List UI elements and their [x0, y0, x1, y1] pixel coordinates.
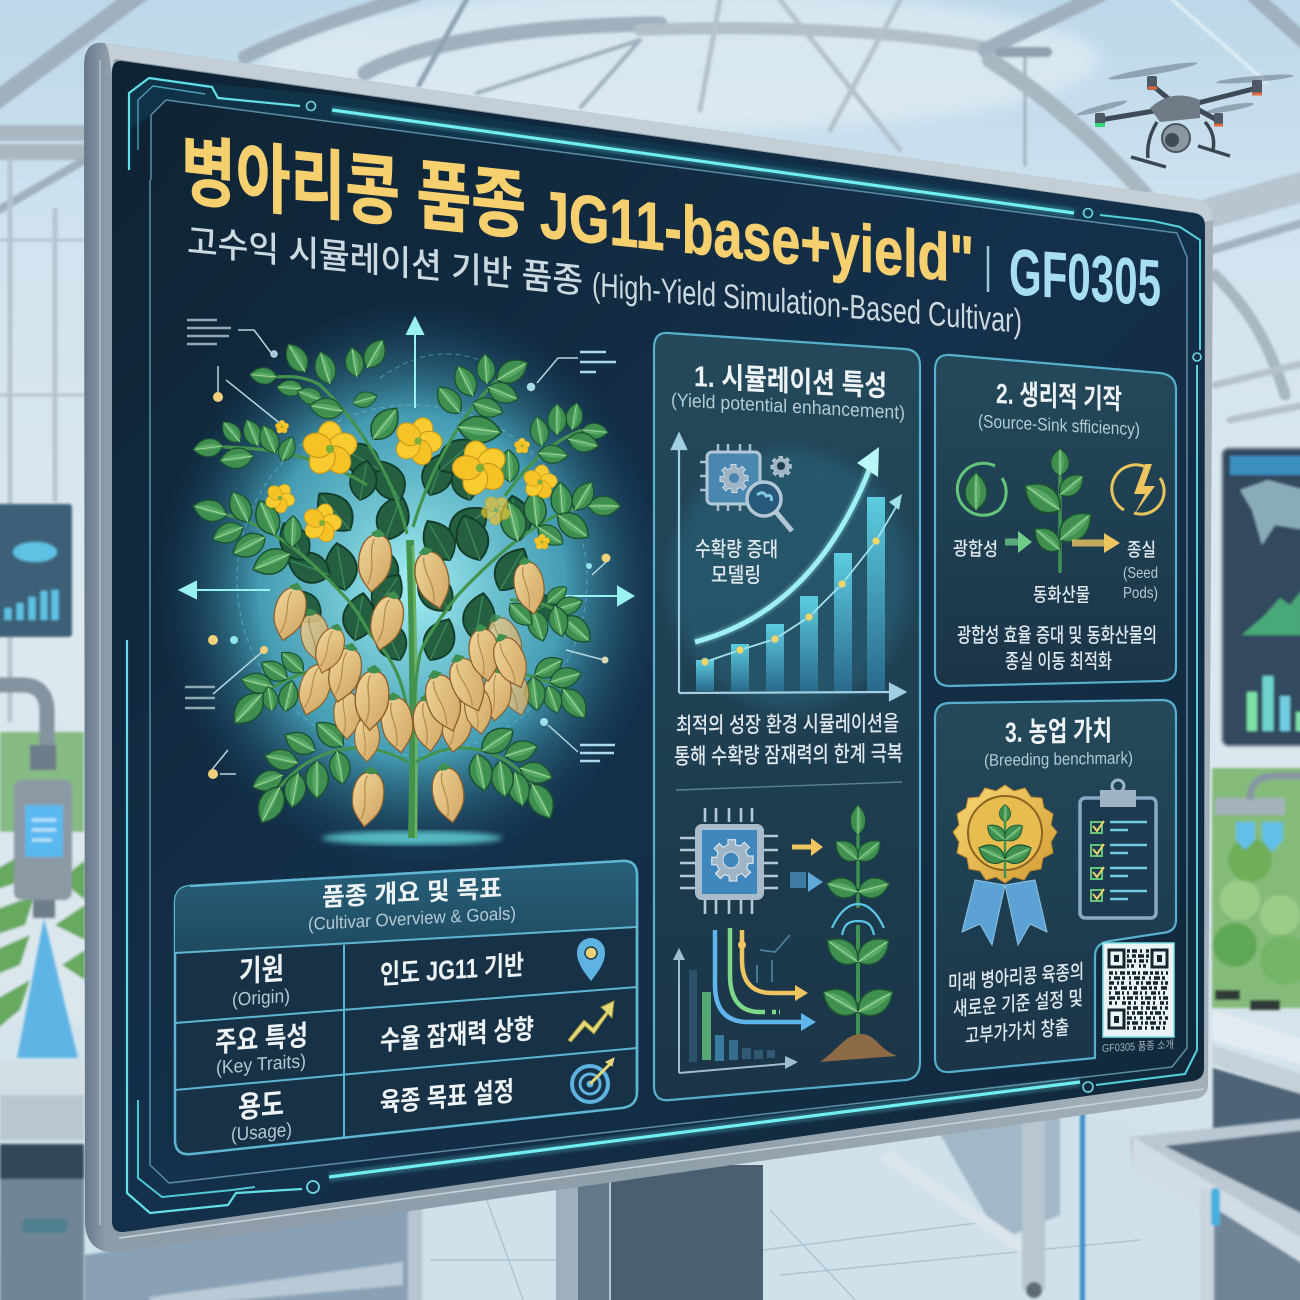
QR code: [1103, 943, 1174, 1037]
row: origin: 인도 JG11 기반: [380, 950, 524, 990]
panel 1 description: 통해 수확량 잠재력의 한계 극복: [674, 741, 903, 769]
panel 1 description: 최적의 성장 환경 시뮬레이션을: [676, 711, 899, 738]
panel 2 description: [957, 624, 1157, 673]
panel 3 description: 고부가가치 창출: [965, 1016, 1069, 1048]
row: key traits: (Key Traits): [216, 1051, 306, 1079]
roof beams: [0, 0, 1300, 720]
panel 1 heading: (Yield potential enhancement): [671, 390, 905, 424]
left plants: [0, 732, 85, 1030]
overview header band: [175, 861, 637, 953]
panel 1 heading: 1. 시뮬레이션 특성: [694, 360, 887, 403]
icon: processor: [680, 808, 778, 914]
panel: 1 simulation traits: [654, 333, 920, 1100]
left sensor device: [0, 685, 78, 1058]
icon: location pin: [577, 938, 605, 981]
icon: energy cycle: [1112, 464, 1164, 515]
modelling label: 수확량 증대: [695, 538, 778, 562]
panel: 3 agricultural value: [935, 700, 1176, 1072]
overview heading: [308, 875, 516, 934]
growth arrows: [180, 318, 633, 605]
title: [181, 129, 1161, 321]
right bench: [1130, 1118, 1300, 1300]
icon: target: [572, 1058, 614, 1102]
dark foliage: [272, 430, 564, 666]
stems and branches: [223, 377, 588, 838]
background tables: [84, 1105, 1085, 1300]
monitor stand: [556, 1165, 763, 1300]
subtitle: (High-Yield Simulation-Based Cultivar): [592, 266, 1022, 341]
label: seed pods: [1123, 539, 1158, 602]
neon border: [127, 78, 1201, 1213]
row: key traits: 수율 잠재력 상향: [380, 1014, 534, 1056]
icon: leaf cycle: [957, 463, 1006, 515]
screen surface: [112, 61, 1205, 1232]
panel 2 description: 종실 이동 최적화: [1005, 650, 1112, 673]
subtitle: [187, 222, 1022, 341]
panel 3 description: 미래 병아리콩 육종의: [948, 960, 1084, 995]
row: origin: [232, 950, 524, 1011]
panel 2 heading: [978, 378, 1140, 439]
label: seed pods: Pods): [1123, 585, 1158, 602]
overview heading: (Cultivar Overview & Goals): [308, 903, 516, 934]
icon: gold medal with ribbon: [953, 785, 1057, 945]
subtitle: 고수익 시뮬레이션 기반 품종: [187, 222, 583, 301]
arrow: plant to pods: [1072, 533, 1120, 553]
panel 1 heading: [671, 360, 905, 424]
panel 2 description: 광합성 효율 증대 및 동화산물의: [957, 624, 1157, 647]
row: key traits: 주요 특성: [215, 1020, 308, 1058]
left monitor: [0, 504, 72, 637]
row: origin: (Origin): [232, 986, 290, 1011]
icon: checklist clipboard: [1080, 780, 1156, 918]
floor: [420, 1110, 1300, 1300]
panel 3 description: [948, 960, 1084, 1048]
modelling label: 모델링: [711, 564, 761, 587]
panel 3 description: 새로운 기준 설정 및: [953, 987, 1083, 1021]
panel 3 heading: 3. 농업 가치: [1005, 715, 1112, 748]
row: origin: 기원: [239, 953, 284, 989]
annotation lines: [185, 320, 616, 779]
row: usage: 육종 목표 설정: [380, 1076, 514, 1118]
row: usage: (Usage): [231, 1120, 292, 1146]
data link nodes: [832, 904, 884, 935]
panel 2 heading: (Source-Sink sfficiency): [978, 411, 1140, 439]
icon: upper seedling: [824, 805, 892, 908]
QR caption: GF0305 품종 소개: [1102, 1038, 1174, 1055]
main title Korean: 병아리콩 품종: [181, 129, 526, 250]
label: assimilates: 동화산물: [1033, 584, 1090, 606]
leaflets: [190, 335, 621, 828]
label: seed pods: (Seed: [1123, 565, 1158, 582]
panel 3 heading: [984, 715, 1133, 770]
row: key traits: [215, 1014, 534, 1079]
panel: 2 physiological mechanism: [935, 355, 1176, 686]
main title Latin: JG11-base+yield": [540, 177, 974, 298]
label: photosynthesis: 광합성: [953, 538, 998, 561]
arrow: source to plant: [1005, 531, 1032, 553]
row: usage: 용도: [238, 1088, 284, 1125]
icon: central plant: [1018, 448, 1098, 573]
plant illustration: [157, 300, 667, 870]
icon: lower plant in soil: [817, 925, 899, 1062]
pods: [268, 527, 549, 829]
right plants: [1212, 768, 1300, 1008]
flowers: [258, 409, 561, 551]
modelling label: [695, 538, 778, 587]
icon: rising arrow: [568, 1001, 614, 1042]
overview heading: 품종 개요 및 목표: [322, 875, 502, 912]
icon: chip with gear and magnifier: [700, 444, 792, 531]
yield bar chart with rising curves: [670, 434, 910, 710]
left tray and cabinet: [0, 1062, 84, 1300]
mini bar chart: [673, 935, 798, 1073]
panel 2 heading: 2. 생리적 기작: [996, 378, 1122, 415]
flow arrows to plant: [790, 838, 823, 892]
row: usage: [231, 1076, 514, 1146]
panel 1 description: [674, 711, 903, 769]
right tray: [1213, 1010, 1300, 1190]
icon: drone: [1076, 60, 1294, 167]
code: GF0305: GF0305: [1009, 235, 1161, 321]
growth signal curves: [715, 928, 816, 1031]
right monitor: [1222, 448, 1300, 746]
label: seed pods: 종실: [1127, 539, 1156, 561]
panel 3 heading: (Breeding benchmark): [984, 748, 1133, 770]
panel: cultivar overview and goals: [175, 861, 637, 1154]
